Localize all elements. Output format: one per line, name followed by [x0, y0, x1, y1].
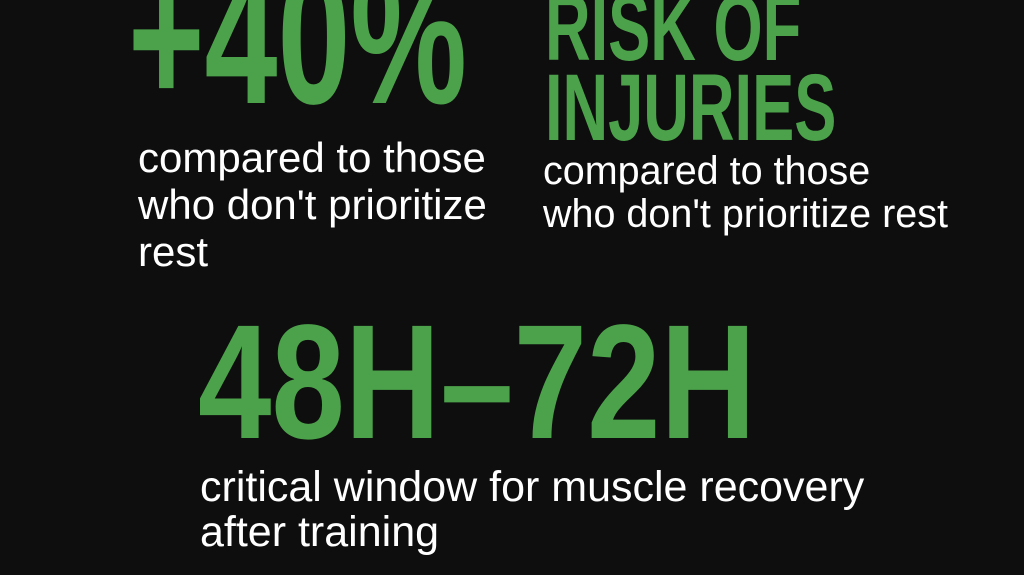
stat: 48H–72H: 48H–72H — [198, 290, 756, 473]
text: left description: who don't prioritize — [138, 181, 487, 228]
text: right description — [543, 149, 948, 236]
heading: risk of injuries — [545, 0, 836, 161]
text: right description: compared to those — [543, 149, 870, 193]
text: left description — [138, 134, 487, 275]
text: left description: compared to those — [138, 134, 486, 181]
text: bottom description: after training — [200, 508, 439, 556]
text: left description: rest — [138, 228, 208, 275]
text: right description: who don't prioritize rest — [543, 192, 948, 236]
text: bottom description: critical window for muscle recovery — [200, 463, 864, 511]
heading: risk of injuries: INJURIES — [545, 55, 836, 161]
text: bottom description — [200, 463, 864, 556]
